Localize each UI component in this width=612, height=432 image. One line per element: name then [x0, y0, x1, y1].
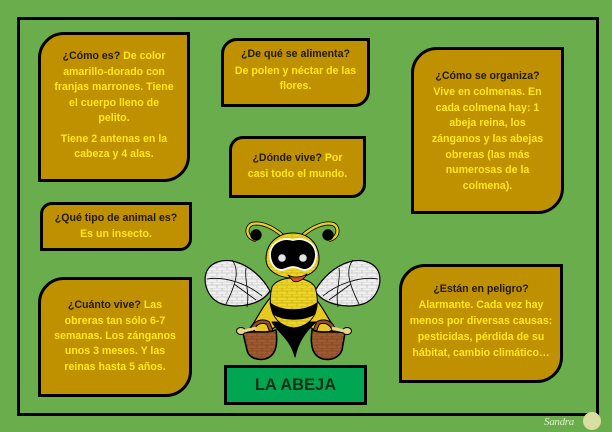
panel: cómo es	[38, 32, 190, 182]
panel: están en peligro: pesticidas, pérdida de su	[418, 331, 544, 343]
panel: cuánto vive: ¿Cuánto vive? Las	[68, 299, 162, 311]
title: la abeja: LA ABEJA	[255, 376, 336, 394]
panel: cómo se organiza: cada colmena hay: 1	[436, 102, 539, 114]
panel: cómo se organiza: zánganos y las abejas	[432, 133, 543, 145]
title: la abeja	[224, 365, 367, 405]
panel: cuánto vive	[38, 277, 192, 397]
panel: cómo es: pelito.	[98, 112, 130, 124]
panel: cuánto vive: obreras tan sólo 6-7	[65, 315, 165, 327]
logo: signature	[544, 412, 601, 430]
panel: cómo es: franjas marrones. Tiene	[54, 81, 174, 93]
panel: cómo se organiza: obreras (las más	[445, 149, 530, 161]
panel: están en peligro: hábitat, cambio climático…	[412, 347, 550, 359]
panel: cuánto vive: semanas. Los zánganos	[54, 330, 176, 342]
icon: stinger	[272, 322, 316, 357]
panel: cómo se organiza	[411, 47, 564, 214]
logo: signature: Sandra	[544, 416, 574, 428]
panel: cómo es: Tiene 2 antenas en la	[61, 133, 167, 145]
panel: cómo es: cabeza y 4 alas.	[74, 148, 154, 160]
icon: head	[266, 233, 319, 278]
panel: dónde vive: ¿Dónde vive? Por	[252, 152, 343, 164]
panel: están en peligro	[399, 264, 563, 383]
panel: cuánto vive: unos 3 meses. Y las	[65, 345, 165, 357]
panel: cómo se organiza: colmena).	[463, 180, 512, 192]
panel: están en peligro: ¿Están en peligro?	[433, 283, 529, 295]
panel: de qué se alimenta: flores.	[280, 80, 311, 92]
panel: qué tipo de animal es: ¿Qué tipo de animal es?	[55, 212, 177, 224]
icon: left wing	[205, 260, 270, 307]
illustration: bee	[204, 222, 380, 360]
panel: cómo se organiza: numerosas de la	[446, 164, 529, 176]
panel: cómo es: ¿Cómo es? De color	[62, 50, 166, 62]
panel: cómo es: el cuerpo lleno de	[69, 97, 159, 109]
panel: dónde vive: casi todo el mundo.	[248, 168, 347, 180]
icon: left bucket	[236, 322, 277, 359]
panel: de qué se alimenta	[221, 38, 370, 107]
panel: están en peligro: menos por diversas causas:	[410, 315, 552, 327]
panel: cuánto vive: reinas hasta 5 años.	[64, 361, 166, 373]
panel: están en peligro: Alarmante. Cada vez hay	[419, 299, 543, 311]
panel: cómo es: amarillo-dorado con	[63, 66, 165, 78]
panel: qué tipo de animal es	[40, 202, 192, 251]
panel: de qué se alimenta: ¿De qué se alimenta?	[241, 48, 350, 60]
icon: right wing	[315, 260, 380, 307]
icon: antennae	[247, 224, 338, 240]
panel: cómo se organiza: abeja reina, los	[449, 117, 526, 129]
panel: cómo se organiza: Vive en colmenas. En	[433, 86, 542, 98]
panel: qué tipo de animal es: Es un insecto.	[80, 228, 152, 240]
icon: right bucket	[311, 322, 352, 359]
icon: arms	[250, 296, 335, 336]
icon: mouth	[288, 274, 307, 282]
panel: dónde vive	[229, 136, 366, 198]
panel: de qué se alimenta: De polen y néctar de las	[235, 65, 356, 77]
panel: cómo se organiza: ¿Cómo se organiza?	[435, 70, 540, 82]
icon: body	[270, 278, 317, 328]
